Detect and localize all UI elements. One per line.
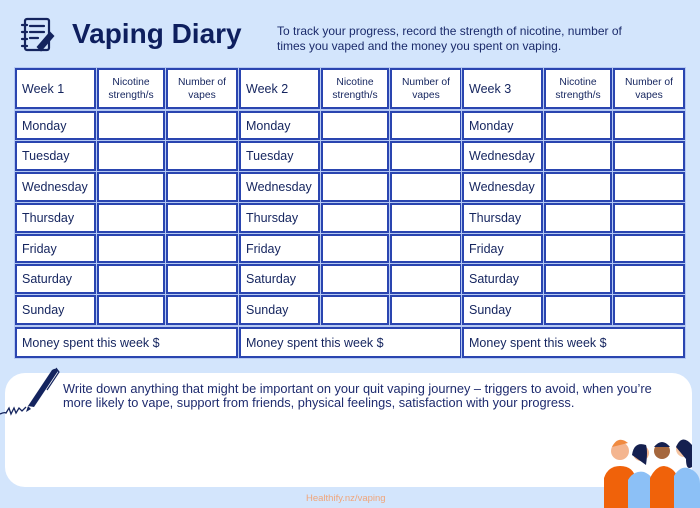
table: week 2: Sunday bbox=[246, 303, 288, 317]
table: week 1: Friday bbox=[22, 242, 57, 256]
table: week 2 bbox=[239, 67, 461, 359]
table: week 1: Wednesday bbox=[22, 180, 88, 194]
table: week 2: Nicotine bbox=[336, 76, 374, 88]
table: week 2: Monday bbox=[246, 118, 290, 132]
table: week 2: Week 2 bbox=[246, 82, 288, 96]
table: week 3: Money spent this week $ bbox=[469, 336, 607, 350]
table: week 1: Saturday bbox=[22, 272, 72, 286]
table: week 2: Saturday bbox=[246, 272, 296, 286]
table: week 3: Thursday bbox=[469, 211, 521, 225]
table: week 2: Money spent this week $ bbox=[246, 336, 384, 350]
table: week 1: Nicotine bbox=[112, 76, 150, 88]
table: week 3: strength/s bbox=[555, 90, 601, 100]
subtitle: To track your progress, record the strength of nicotine, number of times you vaped and the money you spent on vaping. bbox=[277, 24, 622, 53]
table: week 2: Tuesday bbox=[246, 149, 293, 163]
table: week 1: Sunday bbox=[22, 303, 64, 317]
table: week 3: Week 3 bbox=[469, 82, 511, 96]
table: week 1: Tuesday bbox=[22, 149, 69, 163]
table: week 1: Number of bbox=[178, 76, 226, 88]
table: week 2: Thursday bbox=[246, 211, 298, 225]
table: week 3: Wednesday bbox=[469, 149, 535, 163]
icon: pen with scribble bbox=[0, 368, 60, 416]
panel: notes bbox=[5, 373, 692, 487]
table: week 3 bbox=[461, 67, 686, 359]
table: week 2: vapes bbox=[412, 90, 440, 100]
table: week 1: Money spent this week $ bbox=[22, 336, 160, 350]
table: week 3: vapes bbox=[635, 90, 663, 100]
table: week 1: Week 1 bbox=[22, 82, 64, 96]
table: week 3: Monday bbox=[469, 118, 513, 132]
table: week 1: strength/s bbox=[108, 90, 154, 100]
table: week 2: Wednesday bbox=[246, 180, 312, 194]
table: week 2: Number of bbox=[402, 76, 450, 88]
table: week 2: Friday bbox=[246, 242, 281, 256]
table: week 1: Monday bbox=[22, 118, 66, 132]
illustration: group of friends bbox=[604, 440, 700, 508]
table: week 3: Nicotine bbox=[559, 76, 597, 88]
table: week 2: strength/s bbox=[332, 90, 378, 100]
notes text: Write down anything that might be important on your quit vaping journey – triggers to avoid, when you’re more likely to vape, support from friends, physical feelings, satisfaction with your progress. bbox=[63, 381, 652, 410]
table: week 3: Sunday bbox=[469, 303, 511, 317]
footer link: Healthify.nz/vaping bbox=[306, 493, 386, 504]
title: Vaping Diary bbox=[72, 18, 242, 49]
table: week 3: Friday bbox=[469, 242, 504, 256]
table: week 3: Number of bbox=[625, 76, 673, 88]
icon: notebook with pen bbox=[20, 18, 54, 52]
table: week 1: Thursday bbox=[22, 211, 74, 225]
table: week 3: Wednesday bbox=[469, 180, 535, 194]
table: week 3: Saturday bbox=[469, 272, 519, 286]
table: week 1 bbox=[14, 67, 238, 359]
table: week 1: vapes bbox=[188, 90, 216, 100]
